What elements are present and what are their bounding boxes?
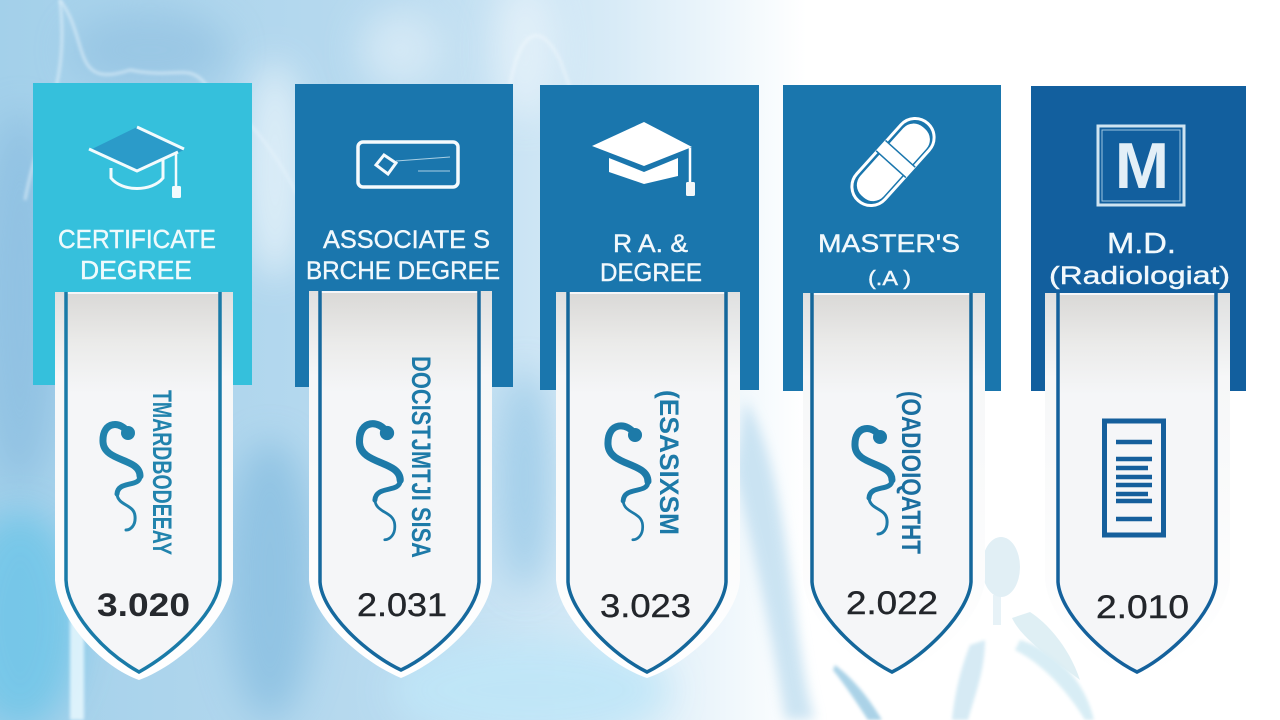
panel: associate degree	[295, 84, 513, 678]
heading: master's	[818, 230, 960, 290]
heading: M.D. radiologist	[1049, 228, 1230, 290]
icon: outlined graduation cap	[89, 127, 184, 198]
value: 3.020	[97, 587, 190, 623]
heading: certificate degree: CERTIFICATE	[58, 224, 216, 254]
panel: master's degree	[783, 85, 1001, 678]
heading: master's: (.A )	[868, 268, 911, 290]
icon: framed letter M	[1098, 126, 1184, 205]
heading: associate degree	[306, 226, 500, 285]
banner: bachelor	[556, 292, 740, 678]
rotated caption: DOCISTJMTJI SISA	[406, 356, 436, 558]
header block: bachelor	[540, 85, 759, 390]
header block: M.D.	[1031, 86, 1246, 391]
heading: certificate degree	[58, 224, 216, 285]
value: 3.023	[600, 588, 691, 624]
panel: M.D. radiologist	[1031, 86, 1246, 678]
heading: associate degree: BRCHE DEGREE	[306, 257, 500, 285]
heading: M.D. radiologist: M.D.	[1107, 228, 1176, 260]
heading: associate degree: ASSOCIATE S	[323, 226, 490, 254]
heading: bachelor degree: R A. &	[613, 230, 688, 258]
icon: solid graduation cap	[592, 122, 695, 196]
header block: certificate	[33, 83, 252, 385]
rotated caption: TMARDBODEEAY	[147, 390, 177, 555]
icon: clipboard	[1104, 420, 1164, 535]
icon: diploma scroll	[843, 110, 943, 214]
heading: certificate degree: DEGREE	[80, 255, 192, 285]
icon: snake	[608, 426, 648, 540]
icon: snake	[103, 425, 140, 530]
icon: id card	[358, 142, 458, 187]
icon: snake	[359, 424, 400, 540]
banner: master's	[803, 293, 985, 678]
heading: M.D. radiologist: (Radiologiat)	[1049, 262, 1230, 290]
panel: certificate degree	[33, 83, 252, 680]
heading: bachelor degree: DEGREE	[600, 259, 702, 287]
banner: certificate	[55, 292, 233, 680]
value: 2.031	[357, 587, 447, 623]
value: 2.022	[846, 585, 938, 621]
heading: bachelor degree	[600, 230, 702, 287]
icon: snake	[855, 429, 892, 534]
icon: framed letter M: M	[1115, 129, 1169, 202]
header block: associate	[295, 84, 513, 387]
header block: master's	[783, 85, 1001, 391]
banner: associate	[309, 291, 492, 678]
rotated caption: (ESASIXSM	[654, 390, 684, 535]
value: 2.010	[1096, 589, 1189, 625]
heading: master's: MASTER'S	[818, 230, 960, 258]
panel: bachelor degree	[540, 85, 759, 678]
banner: M.D.	[1045, 293, 1230, 678]
rotated caption: (OADIOIQATHT	[896, 391, 926, 554]
